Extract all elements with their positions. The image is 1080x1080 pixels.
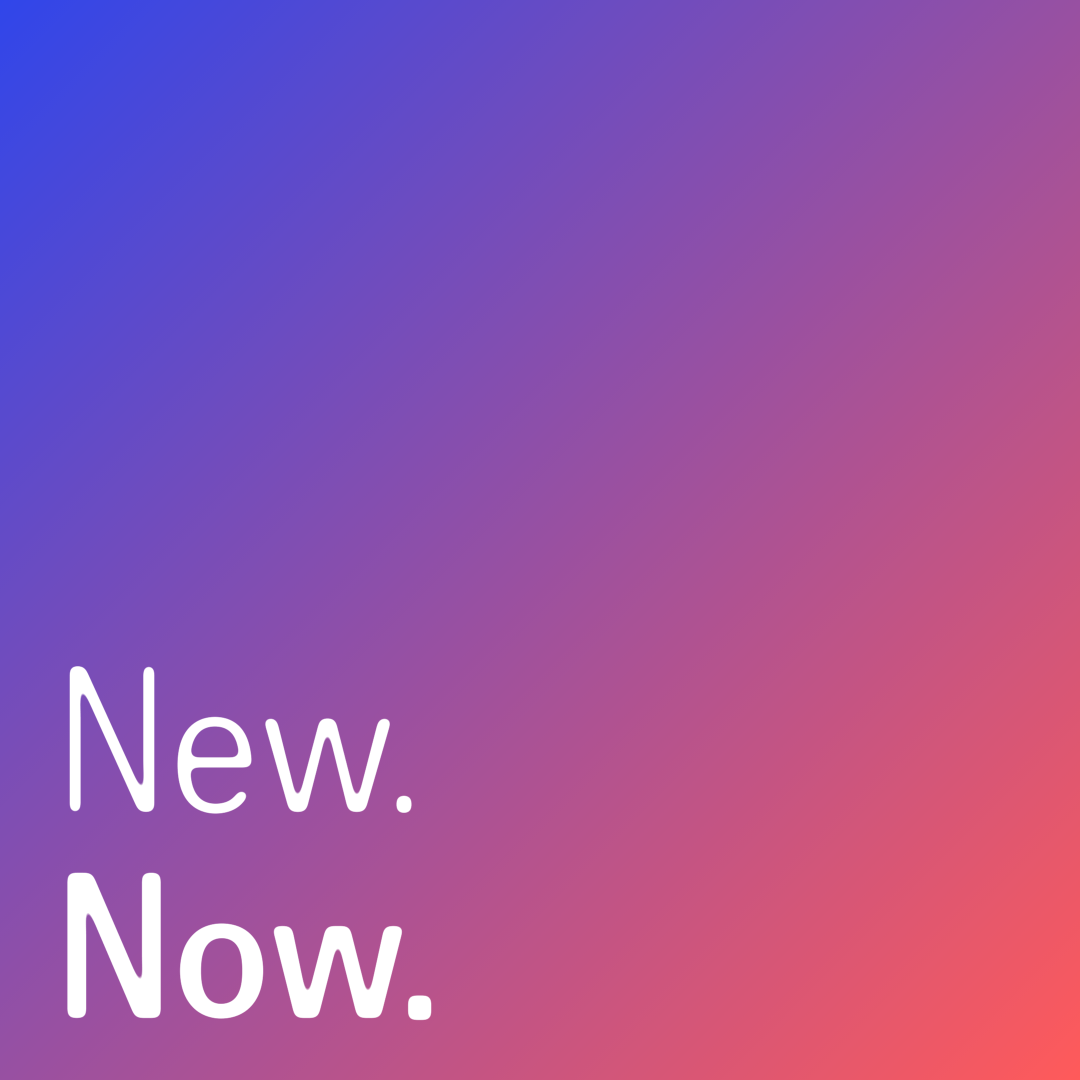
- text: Now.: N: [56, 826, 173, 1065]
- text: New.: w: [261, 650, 394, 852]
- text: Now.: .: [395, 860, 444, 1059]
- text: New.: .: [379, 651, 429, 853]
- text: New.: N: [56, 618, 168, 859]
- text: Now.: w: [270, 858, 406, 1057]
- text: Now.: o: [173, 857, 271, 1056]
- text: New.: e: [170, 650, 260, 852]
